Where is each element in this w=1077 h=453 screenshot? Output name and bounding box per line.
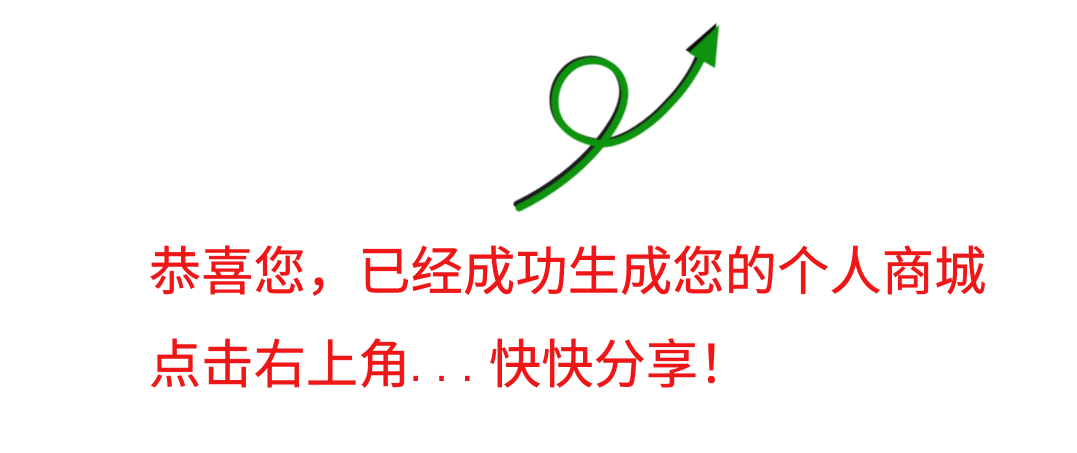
text: share instruction line: ... bbox=[409, 339, 487, 392]
heading: congratulations line: 恭喜您，已经成功生成您的个人商城 bbox=[149, 244, 987, 302]
text: share instruction line: 点击右上角 bbox=[149, 337, 411, 395]
text: share instruction line bbox=[149, 337, 751, 395]
text: share instruction line: 快快分享！ bbox=[489, 337, 751, 395]
